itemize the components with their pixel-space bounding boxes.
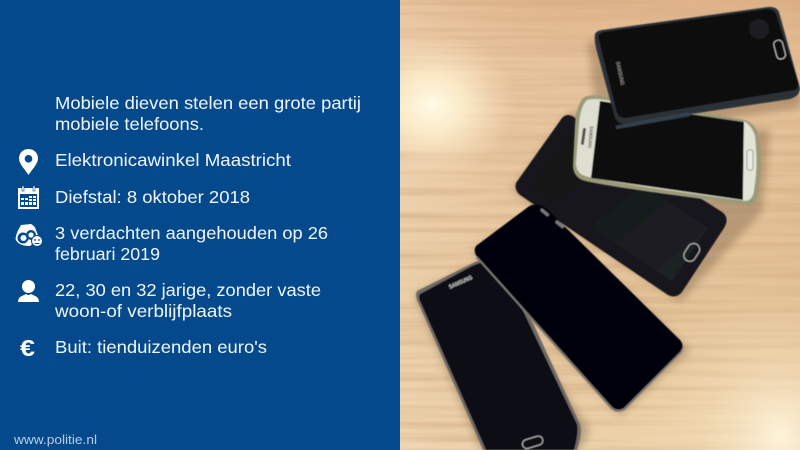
phone: top right Samsung: [595, 7, 800, 129]
speaker: [581, 128, 586, 145]
Samsung logo: SAMSUNG: [448, 275, 474, 291]
text: suspect ages: woon-of verblijfplaats: [54, 301, 232, 321]
panel: blue text panel: [0, 0, 400, 450]
phone shadows: [414, 40, 800, 450]
icon: handcuffs with suspect: [16, 224, 42, 246]
phone: bottom left Samsung: [416, 252, 581, 450]
text: intro: mobiele telefoons.: [55, 114, 204, 134]
icon: person: [18, 280, 39, 302]
home button: [682, 241, 702, 264]
text: website: www.politie.nl: [13, 432, 97, 447]
panel: photo of mobile phones on a wooden table: [400, 0, 800, 450]
Samsung logo: SAMSUNG: [614, 61, 625, 86]
home button: [773, 39, 786, 60]
text: intro: Mobiele dieven stelen een grote partij: [55, 93, 361, 113]
phone: dark grey screen phone: [516, 115, 727, 296]
home button: [747, 150, 753, 170]
text: suspects arrested: 3 verdachten aangehouden op 26: [55, 223, 328, 243]
text: date of theft: Diefstal: 8 oktober 2018: [55, 187, 250, 207]
text: suspect ages: 22, 30 en 32 jarige, zonder vaste: [55, 280, 321, 300]
text: location: Elektronicawinkel Maastricht: [55, 150, 291, 170]
icon: location pin: [19, 149, 38, 175]
wooden table surface: [400, 0, 800, 450]
text: suspects arrested: februari 2019: [55, 244, 160, 264]
home button: [521, 435, 544, 450]
phone: white Samsung: [573, 96, 760, 205]
camera reflection: [749, 19, 769, 39]
Samsung logo: SAMSUNG: [586, 126, 594, 148]
icon: euro sign: €: [20, 335, 35, 361]
phone: large black centre phone: [475, 204, 684, 412]
icon: calendar: [18, 186, 39, 209]
text: loot: Buit: tienduizenden euro's: [55, 337, 267, 357]
